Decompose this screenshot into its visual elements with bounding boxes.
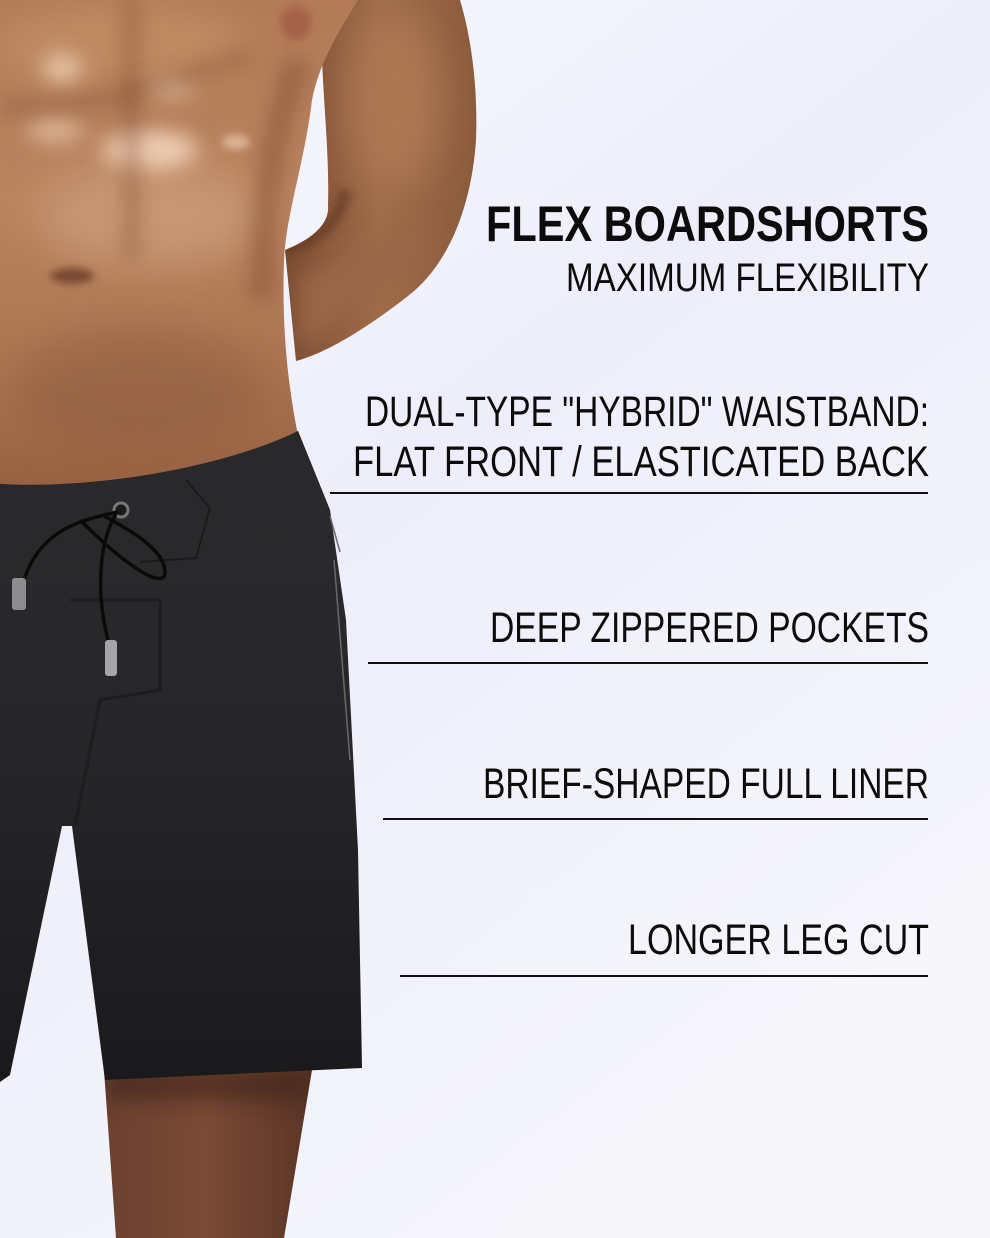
model photo illustration bbox=[0, 0, 480, 1238]
side seam zipper bbox=[330, 516, 350, 760]
nipple bbox=[281, 6, 311, 40]
waistband bbox=[0, 431, 330, 570]
arm bbox=[280, 0, 480, 365]
torso bbox=[0, 0, 370, 500]
feature: waistband bbox=[330, 388, 929, 494]
boardshorts bbox=[0, 431, 362, 1082]
cord tips bbox=[12, 578, 117, 676]
navel bbox=[50, 268, 94, 284]
thigh bbox=[100, 1070, 315, 1238]
eyelet bbox=[114, 503, 128, 517]
fly bbox=[70, 600, 160, 826]
drawcord bbox=[24, 512, 165, 640]
